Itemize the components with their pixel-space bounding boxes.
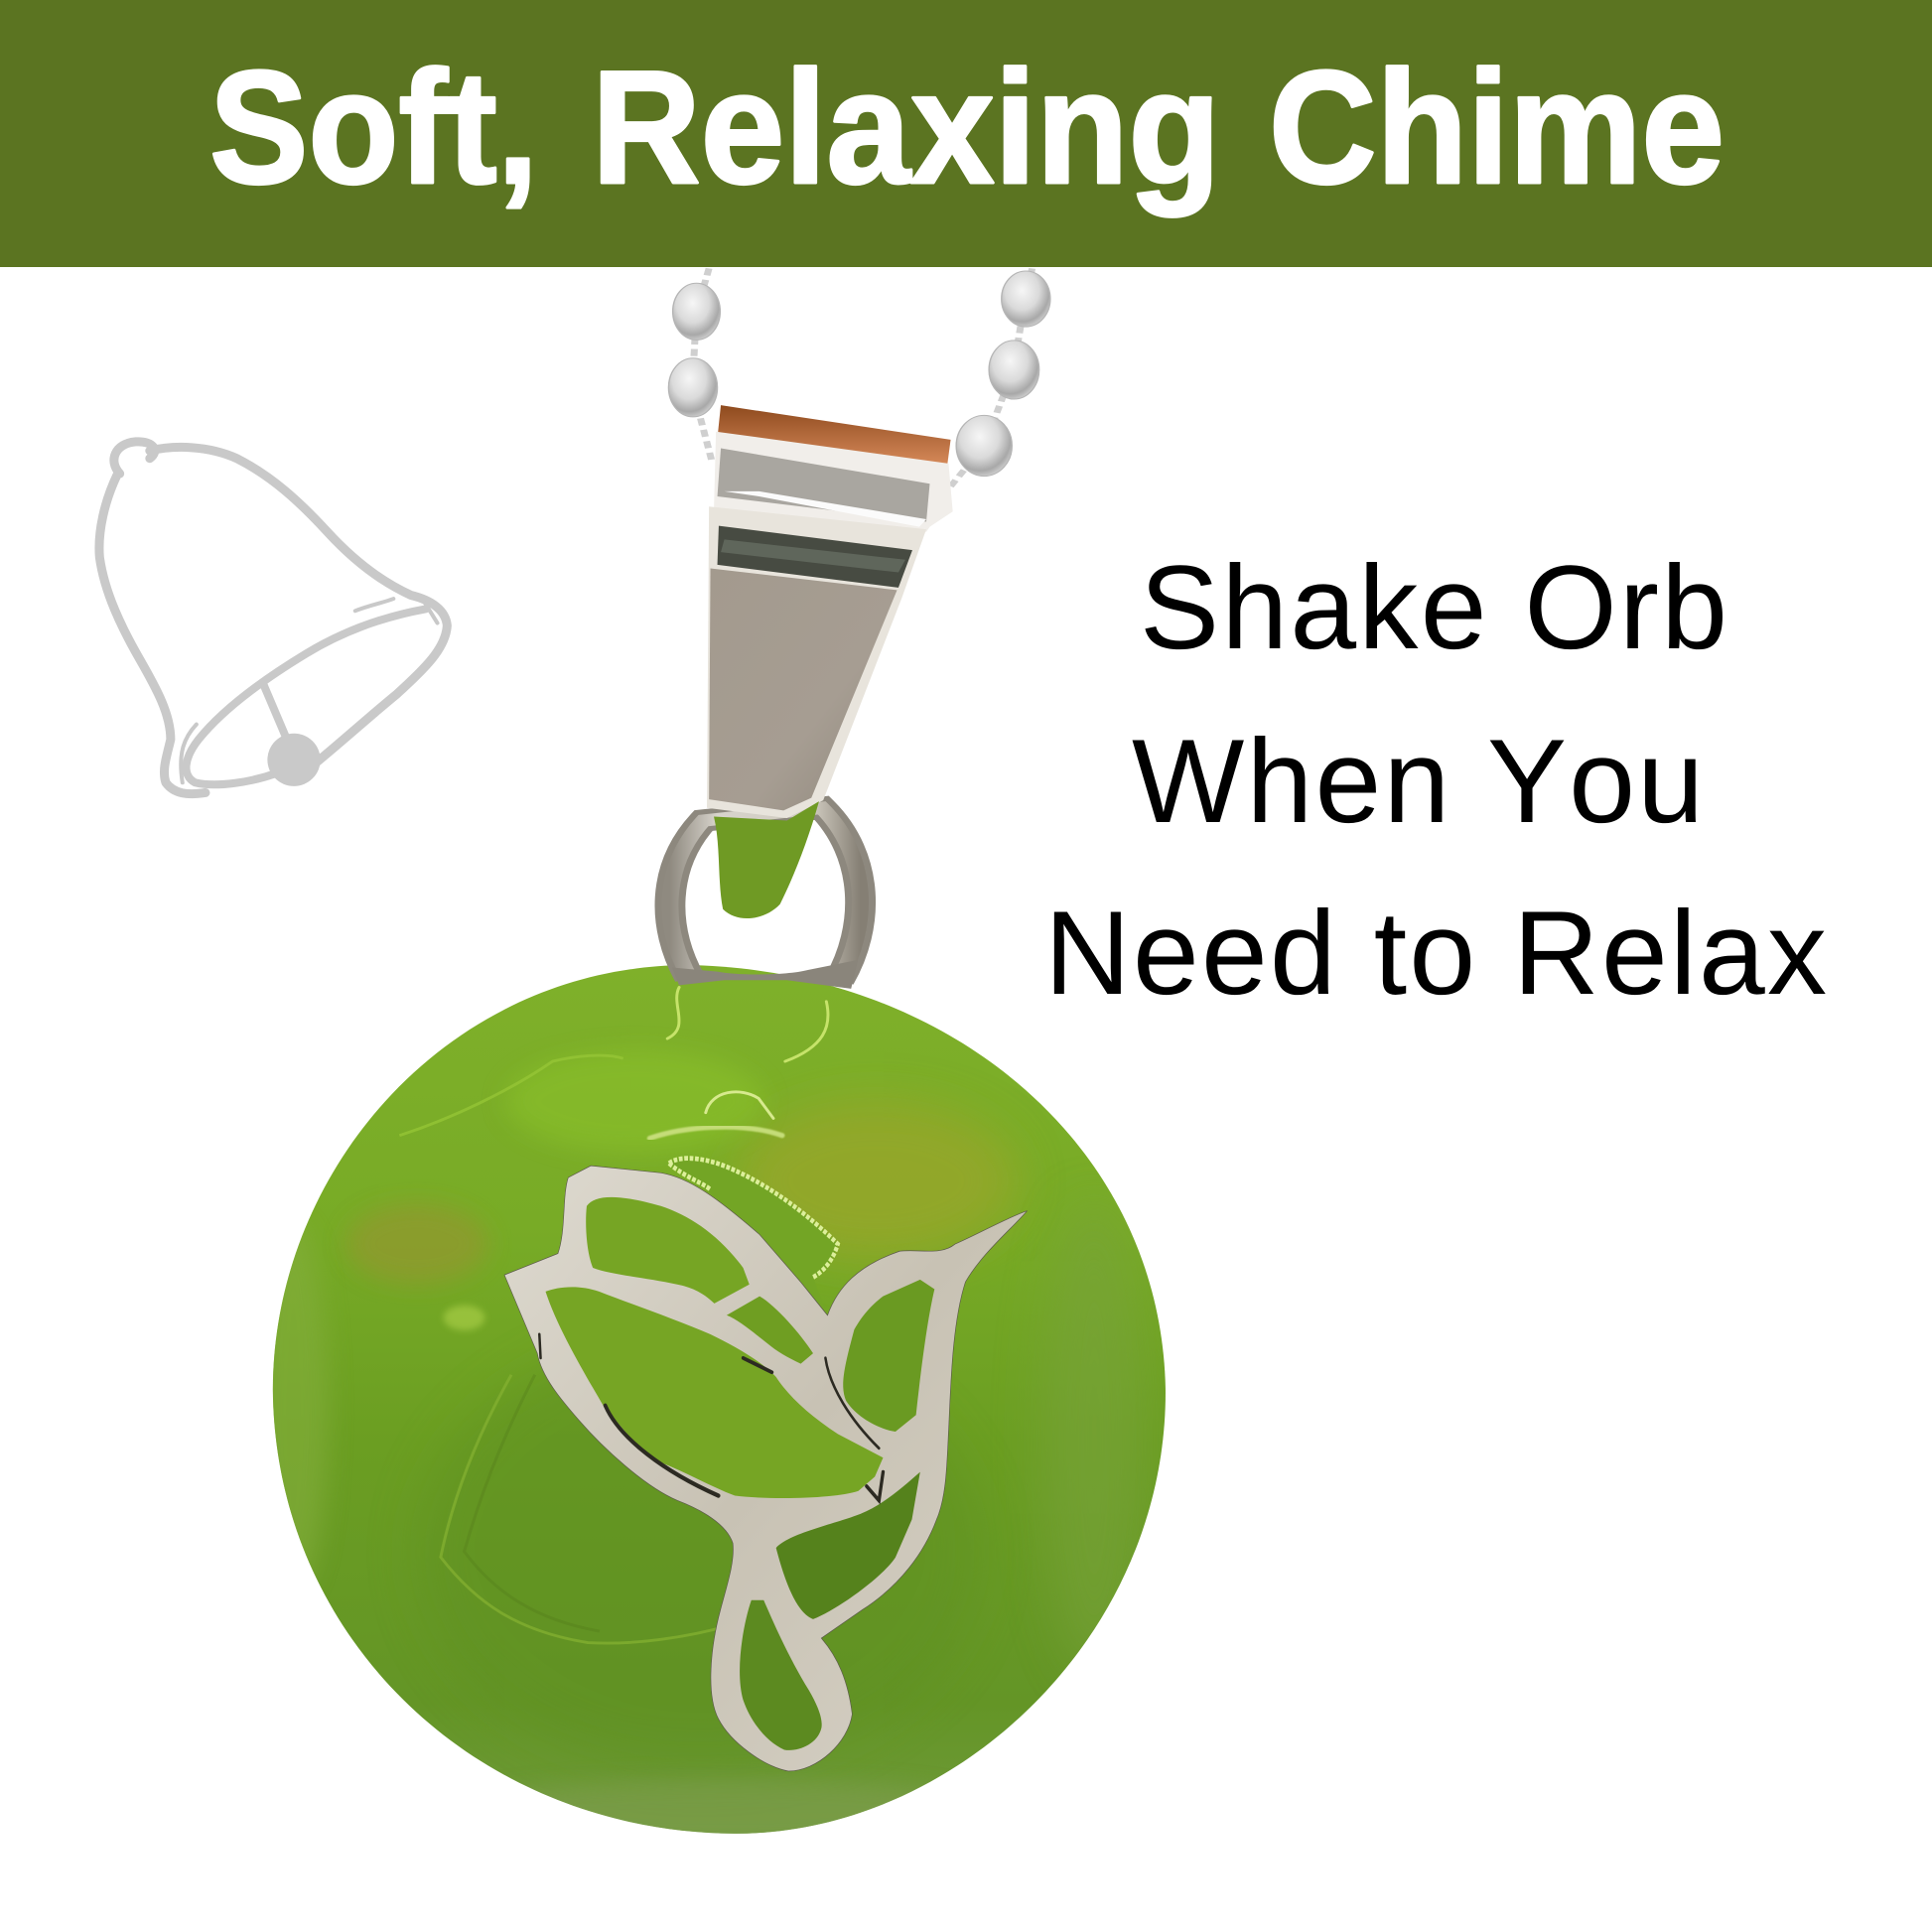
pendant ring (670, 808, 861, 989)
orb (258, 965, 1166, 1848)
title: Chime (1269, 38, 1725, 217)
icon: bell outline (99, 442, 447, 794)
halo reflection (669, 1159, 838, 1315)
title (209, 38, 1725, 217)
right text block: Shake Orb (1140, 541, 1727, 674)
right text block: When You (1132, 715, 1704, 848)
title: Relaxing (592, 38, 1220, 217)
bail green tip (714, 801, 819, 918)
necklace chain (668, 268, 1050, 486)
header banner (0, 0, 1932, 267)
bird cut-outs (546, 1197, 934, 1750)
bird silhouette (504, 1166, 1028, 1771)
title: Soft, (209, 38, 538, 217)
bird shadow lines (539, 1334, 883, 1500)
hummingbird charm (504, 1159, 1028, 1771)
orb reflections (444, 987, 828, 1330)
right text block (1044, 541, 1827, 1020)
pendant bail (707, 405, 953, 918)
right text block: Need to Relax (1044, 887, 1827, 1020)
